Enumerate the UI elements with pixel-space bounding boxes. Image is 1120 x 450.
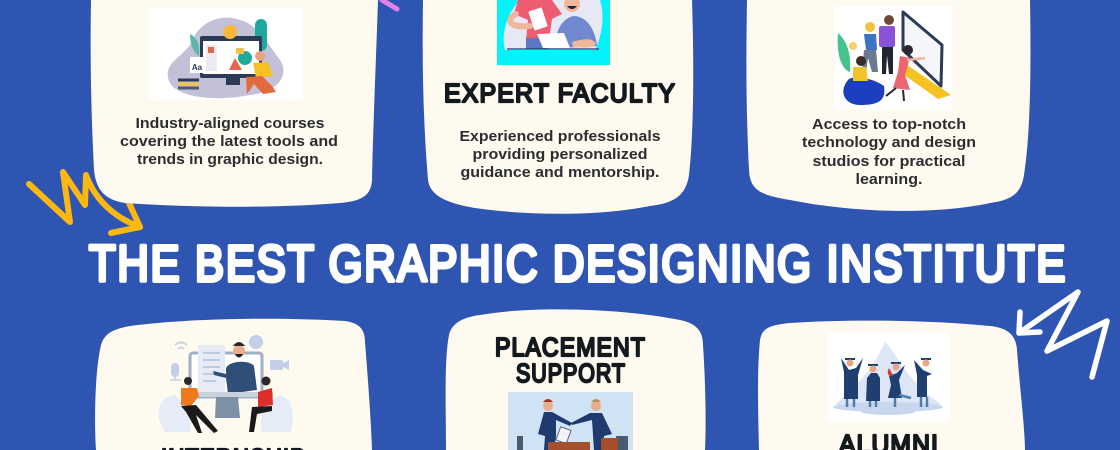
icon: white zigzag arrow [1019,292,1107,377]
text: faculty description: guidance and mentorship. [460,165,660,181]
illustration: handshake [508,392,633,450]
text: faculty description [460,129,660,181]
text: courses description [120,116,338,168]
heading: placement support: PLACEMENT [495,332,646,362]
panel: internship [95,319,372,450]
text: facilities description: studios for practical [812,154,966,170]
panel: facilities [746,0,1030,211]
illustration: designer at monitor: Aa [192,63,203,72]
heading: expert faculty: EXPERT FACULTY [444,78,676,108]
panel: alumni [758,321,1025,450]
text: facilities description [802,117,976,188]
illustration: designer at monitor [149,8,303,100]
text: facilities description: technology and design [802,135,976,151]
text: faculty description: providing personalized [472,147,648,163]
text: courses description: trends in graphic design. [137,152,323,168]
text: courses description: Industry-aligned courses [136,116,324,132]
heading: placement support: SUPPORT [516,358,626,388]
illustration: graduates [828,332,949,422]
text: courses description: covering the latest tools and [120,134,338,150]
panel: expert faculty [423,0,693,214]
text: facilities description: learning. [856,172,922,188]
panel: placement support [446,309,706,450]
panel: courses [91,0,378,207]
illustration: faculty with student [497,0,610,65]
text: faculty description: Experienced professionals [460,129,660,145]
heading: placement support [495,332,646,388]
text: facilities description: Access to top-notch [812,117,966,133]
icon: yellow zigzag arrow [29,172,140,233]
illustration: team at digital board [835,6,952,110]
icon: pink squiggle [382,0,397,9]
illustration: mentor and interns [159,335,293,433]
